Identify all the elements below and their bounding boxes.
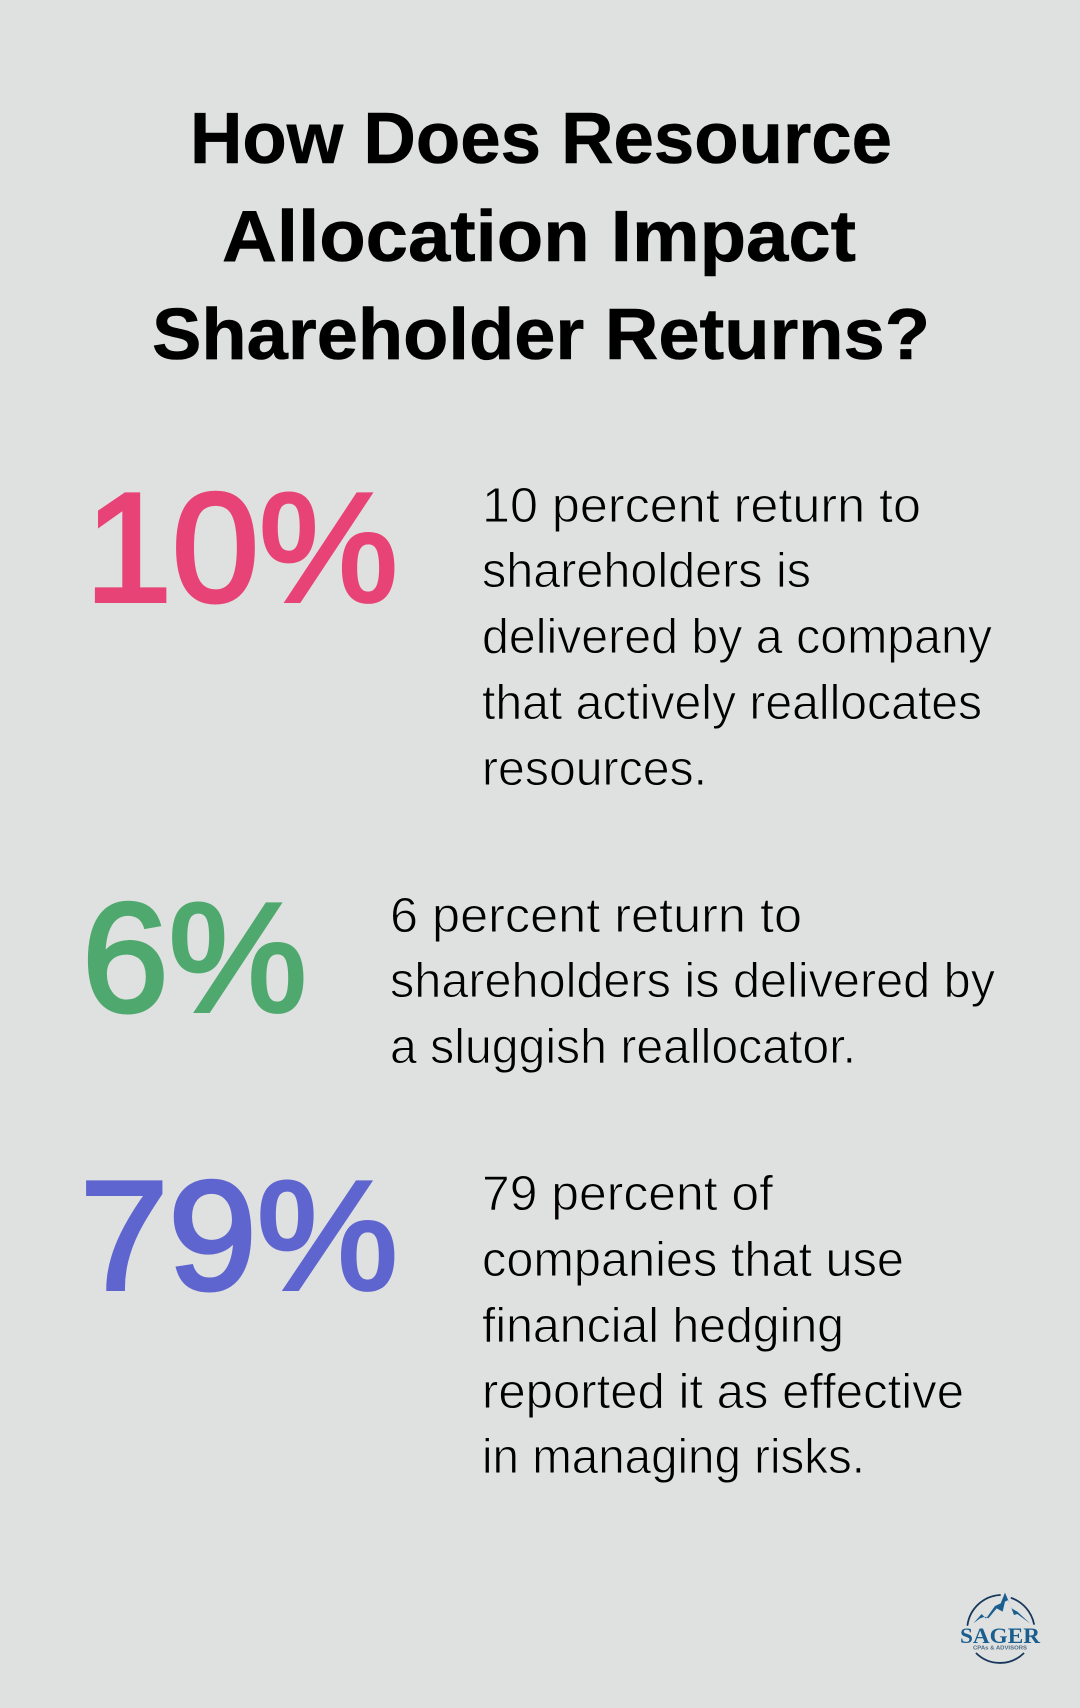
description: 6 percent: 6 percent return to — [390, 889, 802, 943]
panel: 6 percent statistic — [82, 871, 995, 1074]
big number: 10%: 10% — [85, 461, 398, 634]
title: How Does Resource — [190, 99, 892, 179]
logo: Sager CPAs & Advisors — [960, 1593, 1041, 1663]
panel: 79 percent statistic — [80, 1149, 964, 1484]
description: 79 percent: 79 percent of — [482, 1167, 773, 1221]
description: 6 percent: a sluggish reallocator. — [390, 1020, 856, 1074]
title: Shareholder Returns? — [152, 295, 930, 375]
description: 10 percent: that actively reallocates — [482, 676, 982, 730]
wordmark: SAGER — [960, 1623, 1041, 1648]
description: 6 percent: shareholders is delivered by — [390, 954, 995, 1008]
tagline: CPAs & ADVISORS — [973, 1646, 1027, 1652]
icon: circle arcs — [968, 1595, 1034, 1663]
description: 10 percent: 10 percent return to — [482, 479, 921, 533]
title: Allocation Impact — [222, 197, 856, 277]
description: 79 percent: reported it as effective — [482, 1365, 964, 1419]
description: 79 percent: companies that use — [482, 1233, 904, 1287]
description: 10 percent: shareholders is — [482, 544, 811, 598]
title — [152, 99, 930, 375]
big number: 79%: 79% — [80, 1149, 398, 1322]
description: 10 percent: delivered by a company — [482, 610, 992, 664]
panel: 10 percent statistic — [85, 461, 992, 796]
description: 10 percent — [482, 479, 992, 796]
big number: 6%: 6% — [82, 871, 307, 1044]
description: 10 percent: resources. — [482, 742, 707, 796]
description: 6 percent — [390, 889, 995, 1074]
icon: mountain — [973, 1593, 1030, 1623]
description: 79 percent: financial hedging — [482, 1299, 844, 1353]
description: 79 percent: in managing risks. — [482, 1430, 865, 1484]
description: 79 percent — [482, 1167, 964, 1484]
